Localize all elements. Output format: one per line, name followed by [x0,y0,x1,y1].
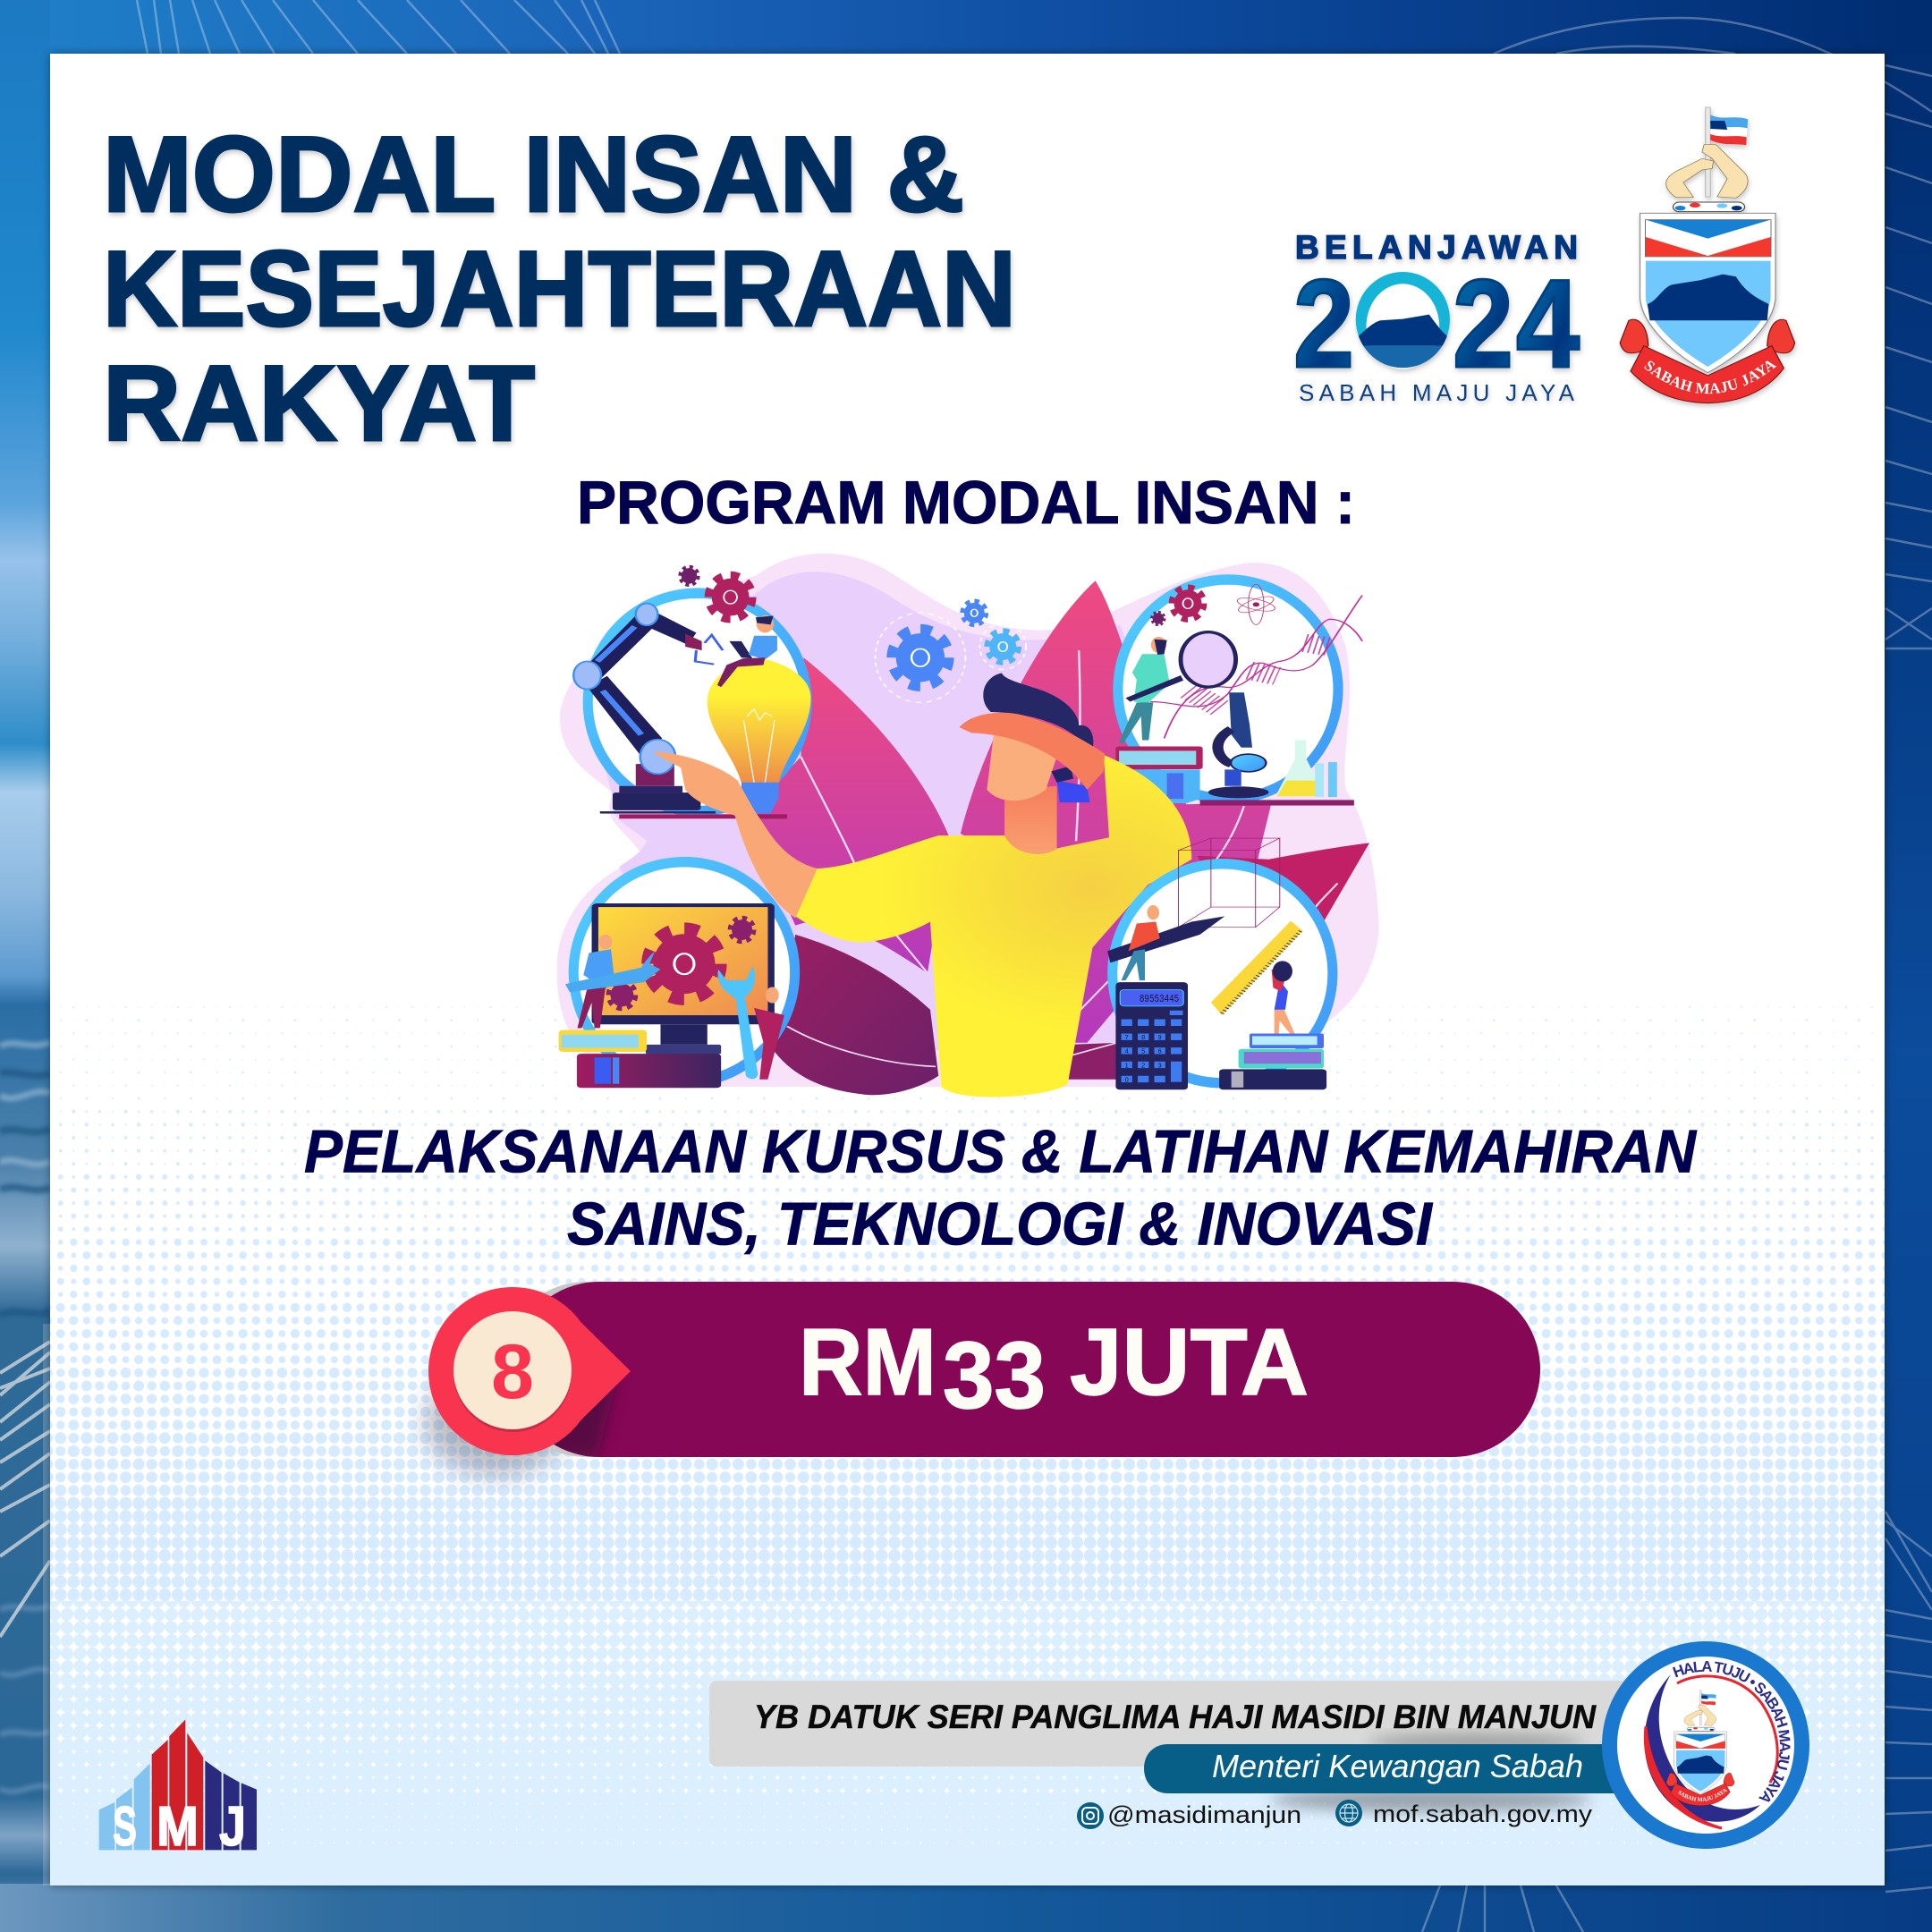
pill body [512,1282,1540,1457]
monitor with gears [592,903,775,1055]
ring: geometry [1107,859,1337,1089]
Sabah coat of arms [1619,107,1798,409]
logo tagline: SABAH MAJU JAYA [1299,379,1575,406]
logo digits: 2 [1293,253,1354,394]
marker [428,1287,631,1455]
calculator: 7 [1125,1033,1129,1041]
amount text: 33 [943,1323,1046,1428]
name bar [709,1681,1631,1767]
badge: hala tuju [1602,1641,1809,1849]
calculator: 5 [1141,1047,1145,1055]
calculator: 4 [1125,1047,1129,1055]
footer: minister credit: YB DATUK SERI PANGLIMA HAJI MASIDI BIN MANJUN [754,1699,1597,1735]
amount text: JUTA [1070,1309,1309,1415]
budget 2024 logo [1293,229,1580,406]
logo digits: 4 [1516,253,1580,394]
pill shadow [425,1368,568,1476]
calculator: 2 [1141,1061,1145,1069]
person: shirt [795,755,1191,1097]
scientist with magnifier and DNA [1119,596,1362,744]
footer: minister credit: Menteri Kewangan Sabah [1212,1748,1583,1784]
footer: minister credit [709,1681,1631,1829]
calculator: 6 [1158,1047,1162,1055]
background blobs [557,554,1379,1087]
illustration: person with STEM circles [557,554,1379,1097]
rings: robot, science, monitor [569,574,1343,1088]
title bar [1368,1733,1583,1751]
SMJ logo [99,1719,257,1858]
calculator: 89553445 [1140,993,1179,1005]
microscope and flask [1115,692,1354,806]
cube with pencil, ruler and figures [1107,838,1303,1035]
leaves [746,580,1369,1095]
badge: hala tuju: HALA TUJU • SABAH MAJU JAYA [1673,1661,1791,1802]
badge crest [1665,1690,1735,1806]
program heading: PELAKSANAAN KURSUS & LATIHAN KEMAHIRAN [304,1118,1698,1186]
amount text: RM [799,1309,936,1415]
calculator: 0 [1125,1075,1129,1083]
amount pill [425,1282,1540,1476]
calculator: 9 [1158,1033,1162,1041]
logo digits [1293,253,1580,394]
book stack [1219,1034,1326,1089]
SMJ logo: M [157,1796,199,1858]
title [103,114,1016,463]
social: instagram: @masidimanjun [1107,1801,1301,1828]
calculator: 1 [1125,1061,1129,1069]
Sabah coat of arms: SABAH MAJU JAYA [1644,360,1776,394]
person: neck and face [987,731,1089,855]
program heading: SAINS, TEKNOLOGI & INOVASI [567,1190,1434,1258]
calculator [1115,982,1188,1089]
marker: 8 [491,1329,534,1415]
calculator: 8 [1141,1033,1145,1041]
SMJ logo: J [219,1796,246,1858]
subheading: program modal insan: PROGRAM MODAL INSAN : [577,469,1355,537]
gears [680,567,1277,702]
badge crest: SABAH MAJU JAYA [1678,1789,1728,1801]
SMJ logo: S [113,1796,137,1858]
amount text [799,1309,1309,1428]
ribbon motto [1640,365,1778,394]
logo heading: belanjawan: BELANJAWAN [1295,229,1578,266]
person: arms and hair [653,674,1105,918]
books and engineers [559,935,784,1088]
logo zero with mountain [1354,272,1452,369]
calculator: 3 [1158,1061,1162,1069]
title: RAKYAT [103,343,535,463]
robot arm [573,604,787,818]
light bulb [708,657,810,814]
title: KESEJAHTERAAN [103,229,1016,349]
program heading [304,1118,1698,1258]
logo digits: 2 [1453,253,1513,394]
social: website: mof.sabah.gov.my [1373,1801,1593,1827]
figure on bulb with laptop [717,615,777,687]
title: MODAL INSAN & [103,114,964,234]
badge arc text [1675,1672,1780,1798]
